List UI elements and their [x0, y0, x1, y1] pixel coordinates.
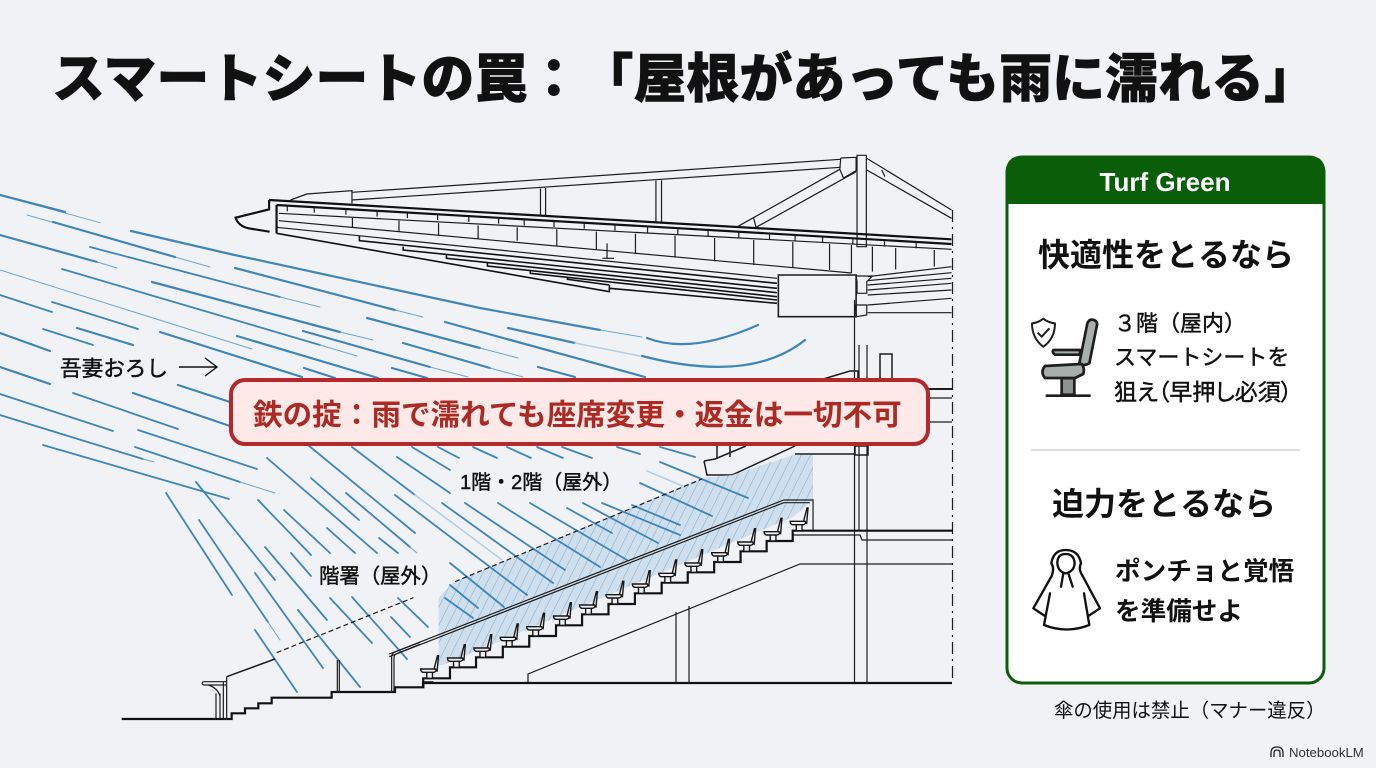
callout: iron rule — [231, 380, 928, 444]
panel header text: Turf Green — [1100, 167, 1230, 197]
heading: impact: 迫力をとるなら — [1052, 486, 1276, 522]
title: スマートシートの罠：「屋根があっても雨に濡れる」 — [52, 49, 1317, 109]
rain streaks: wind-driven rain — [0, 195, 805, 692]
upper rain streaks — [0, 195, 805, 499]
arrow: wind direction — [179, 358, 217, 376]
label: wind name: 吾妻おろし — [60, 356, 168, 381]
heading: comfort: 快適性をとるなら — [1038, 237, 1294, 273]
lower stand: ground steps, rail and bench — [122, 479, 702, 719]
roof bolts — [287, 206, 916, 258]
stepped seating with handrail — [389, 500, 953, 687]
main column — [528, 300, 952, 683]
roof truss top chord — [291, 155, 952, 247]
roof panel posts — [352, 218, 934, 273]
steep rain streaks reaching the lower stand — [166, 445, 527, 692]
divider — [1031, 450, 1300, 451]
text: comfort advice — [1114, 311, 1292, 405]
logo: NotebookLM: NotebookLM — [1289, 745, 1364, 760]
panel header — [1006, 156, 1325, 204]
rain streaks over the 1F/2F seating — [412, 447, 748, 618]
beams right of the callout — [926, 398, 952, 422]
text: comfort advice: ３階（屋内） — [1114, 311, 1246, 336]
text: comfort advice: 狙え（早押し必須） — [1114, 379, 1292, 405]
roof main girder and gutter — [236, 200, 952, 244]
icon: seat with shield — [1032, 319, 1097, 396]
stand cross-section: roof structure — [236, 155, 952, 317]
label: stand area: 階署（屋外） — [319, 565, 441, 588]
upper deck underside — [704, 354, 892, 475]
text: comfort advice: スマートシートを — [1114, 345, 1289, 370]
posts and bench — [202, 642, 420, 719]
handrail — [389, 500, 813, 657]
footnote: umbrellas prohibited: 傘の使用は禁止（マナー違反） — [1054, 700, 1325, 722]
callout: iron rule: 鉄の掟：雨で濡れても座席変更・返金は一切不可 — [253, 399, 902, 432]
panel frame — [1007, 157, 1324, 683]
slope line continuing as dashes — [227, 659, 275, 677]
panel: Turf Green advice — [1006, 156, 1325, 683]
floor line — [423, 683, 952, 687]
columns, floors and upper deck — [423, 210, 952, 687]
hatched zone: rain reach over the seats — [439, 455, 813, 665]
stairs — [423, 531, 953, 687]
text: impact advice: を準備せよ — [1115, 597, 1243, 626]
advertising board under the roof — [778, 275, 856, 317]
label: 1st and 2nd floor: 1階・2階（屋外） — [460, 471, 622, 494]
section break line — [952, 210, 954, 683]
ground steps — [122, 682, 433, 719]
icon: poncho — [1033, 550, 1100, 629]
text: impact advice — [1115, 557, 1294, 626]
text: impact advice: ポンチョと覚悟 — [1115, 557, 1294, 586]
